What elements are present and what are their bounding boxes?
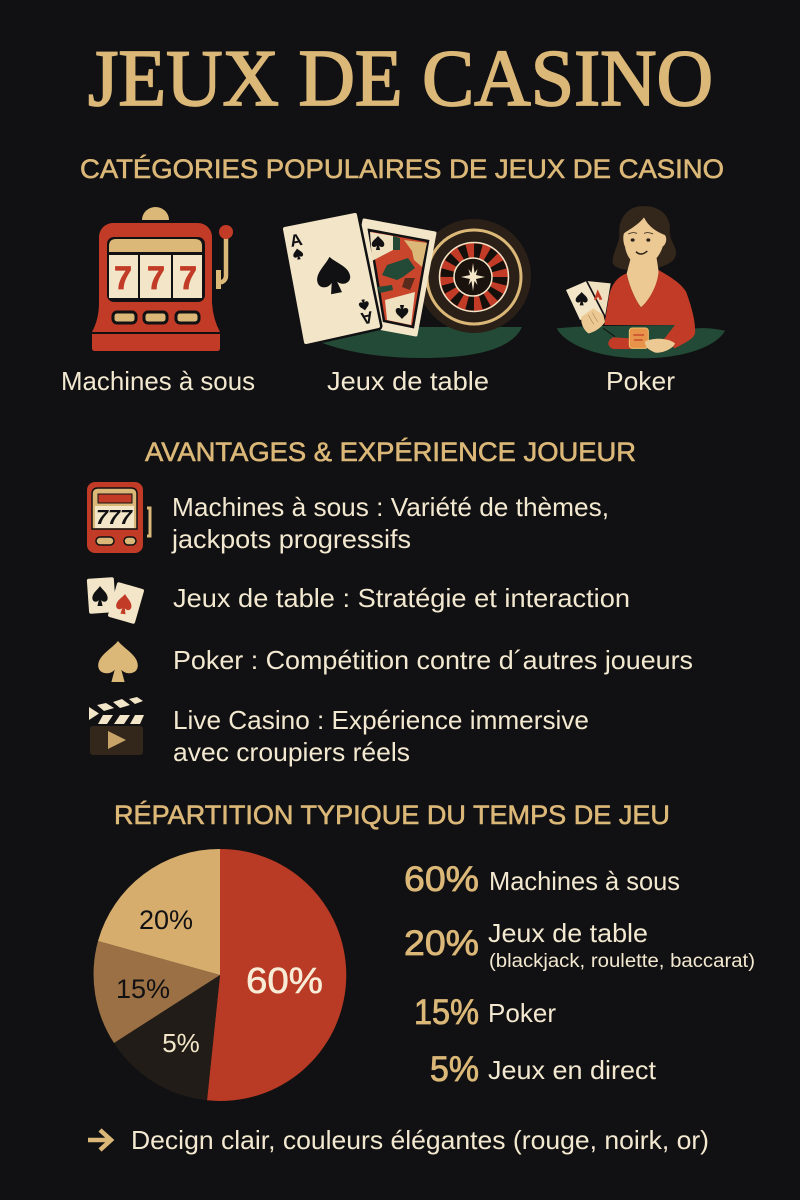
pie chart: 15%: [116, 974, 170, 1004]
legend: 20%: Jeux de table: [488, 918, 648, 948]
text: machines à sous: [171, 492, 609, 554]
icon: two cards: [87, 577, 144, 624]
legend: 15%: 15%: [414, 993, 479, 1032]
text: poker: Poker : Compétition contre d´autres joueurs: [173, 645, 693, 675]
label: machines à sous: Machines à sous: [61, 366, 255, 396]
label: jeux de table: Jeux de table: [327, 366, 489, 396]
icon: small slot machine: [87, 482, 150, 553]
heading: répartition: RÉPARTITION TYPIQUE DU TEMPS DE JEU: [114, 800, 670, 830]
legend: 20%: (blackjack, roulette, baccarat): [489, 951, 755, 972]
icon: slot machine: 7: [147, 260, 165, 296]
legend: 20%: 20%: [404, 924, 479, 963]
pie chart: 5%: [162, 1028, 200, 1058]
icon: small slot machine: 777: [96, 507, 133, 529]
heading: avantages: AVANTAGES & EXPÉRIENCE JOUEUR: [145, 437, 636, 467]
legend: 60%: [404, 860, 680, 899]
text: jeux de table: Jeux de table : Stratégie et interaction: [173, 583, 630, 613]
title: JEUX DE CASINO: [88, 33, 713, 123]
text: machines à sous: Machines à sous : Variété de thèmes,: [172, 492, 609, 522]
legend: 15%: Poker: [488, 998, 556, 1028]
icon: poker player: [557, 206, 725, 358]
pie chart: [94, 849, 346, 1101]
icon: slot machine: 7: [114, 260, 132, 296]
text: live casino: Live Casino : Expérience immersive: [173, 705, 589, 735]
footer note: Decign clair, couleurs élégantes (rouge, noirk, or): [131, 1125, 709, 1155]
icon: slot machine: 7: [179, 260, 197, 296]
legend: 20%: [404, 918, 755, 972]
heading: catégories: CATÉGORIES POPULAIRES DE JEUX DE CASINO: [80, 154, 724, 184]
arrow: [88, 1130, 111, 1150]
text: live casino: avec croupiers réels: [173, 737, 410, 767]
label: poker: Poker: [606, 366, 675, 396]
pie chart: 20%: [139, 905, 193, 935]
legend: 60%: 60%: [404, 860, 479, 899]
text: live casino: [173, 705, 589, 767]
legend: 60%: Machines à sous: [489, 866, 680, 896]
text: machines à sous: jackpots progressifs: [171, 524, 411, 554]
icon: clapperboard: [89, 697, 144, 755]
pie chart: 60%: [246, 960, 323, 1001]
legend: 5%: [430, 1050, 657, 1089]
icon: gold spade: [98, 641, 138, 682]
icon: cards and roulette: A: [359, 307, 375, 328]
icon: slot machine: [92, 207, 233, 351]
icon: cards and roulette: A: [288, 230, 304, 251]
legend: 15%: [414, 993, 556, 1032]
legend: 5%: 5%: [430, 1050, 479, 1089]
icon: cards and roulette: [285, 215, 531, 358]
legend: 5%: Jeux en direct: [488, 1055, 657, 1085]
